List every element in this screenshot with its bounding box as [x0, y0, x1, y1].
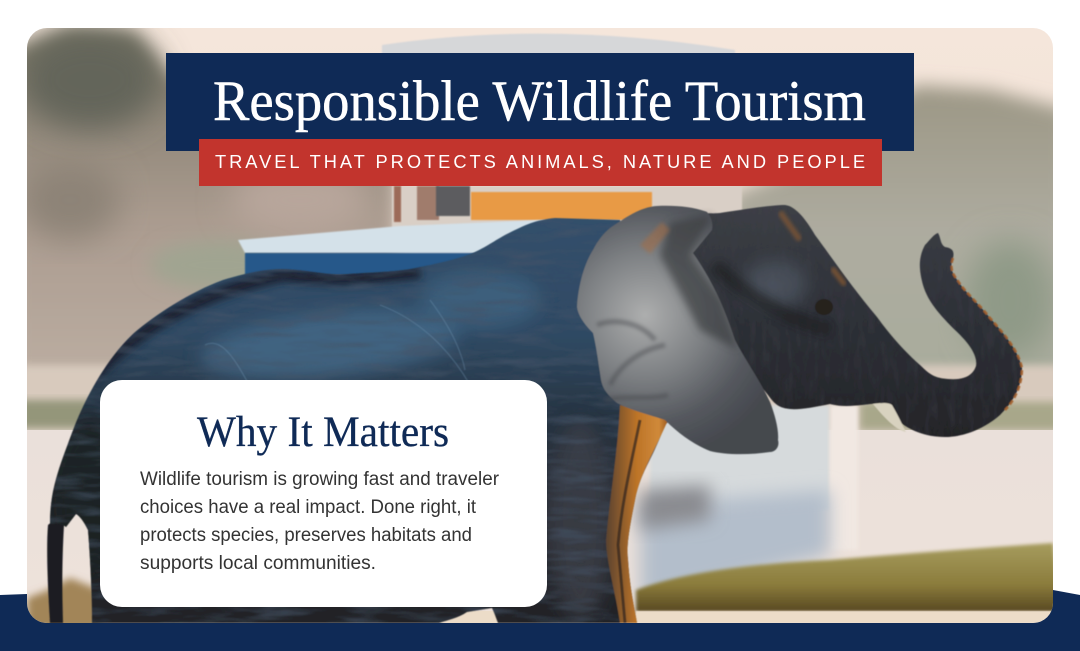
panel body text: protects species, preserves habitats and [140, 525, 472, 546]
head and trunk [680, 205, 1022, 437]
elephant [40, 200, 1030, 623]
panel heading: Why It Matters [197, 409, 449, 456]
panel: why it matters [100, 380, 547, 607]
panel body text: Wildlife tourism is growing fast and traveler [140, 469, 500, 490]
eye [815, 299, 833, 315]
title banner [166, 53, 914, 151]
panel body text: supports local communities. [140, 553, 376, 574]
head skin texture and shading [712, 210, 1020, 435]
navy base band [0, 590, 1080, 651]
subtitle text: TRAVEL THAT PROTECTS ANIMALS, NATURE AND PEOPLE [215, 151, 868, 172]
title text: Responsible Wildlife Tourism [213, 70, 866, 133]
leg shadow crease [618, 420, 640, 623]
panel body text: choices have a real impact. Done right, it [140, 497, 477, 518]
reed grass bank [27, 543, 1060, 630]
ear fold detail [597, 322, 668, 400]
ear [577, 206, 778, 454]
tusk [873, 403, 906, 432]
elephant tail [47, 515, 64, 623]
lit front leg edge [606, 405, 668, 623]
panel body text [140, 469, 500, 574]
ear shading [660, 215, 738, 350]
safari boat [238, 34, 858, 605]
trunk sunlit rim [951, 258, 1022, 410]
subtitle banner [199, 139, 882, 186]
elephant body and legs [50, 218, 680, 623]
body highlights and shadows [50, 230, 620, 623]
ear orange tint [640, 222, 670, 254]
